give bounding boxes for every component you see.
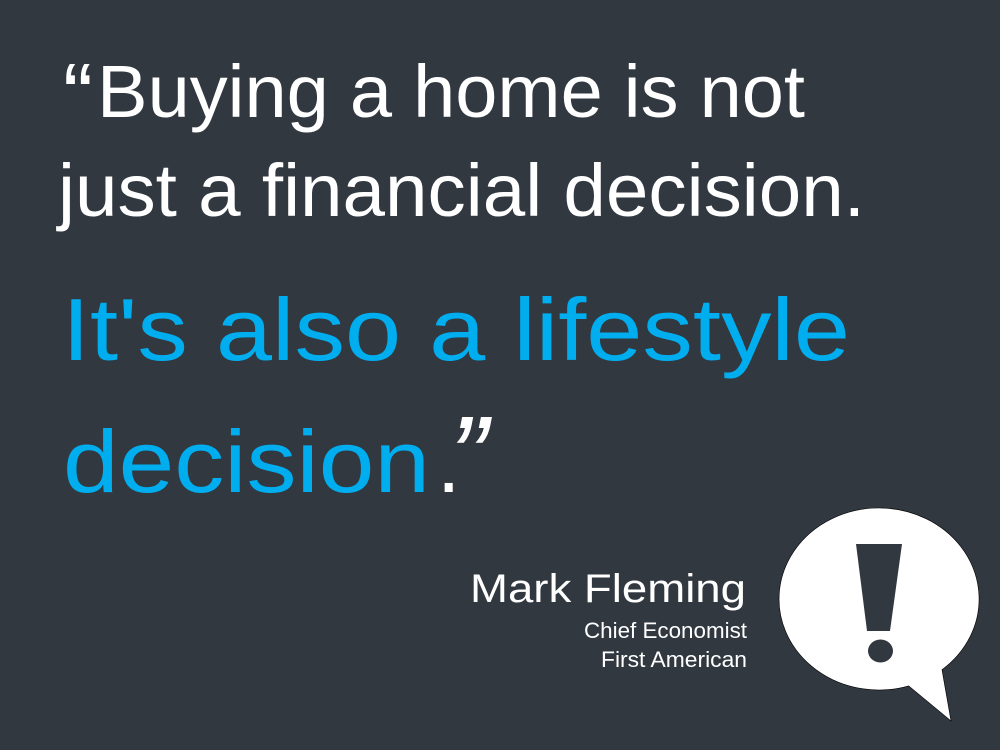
- quote: blue highlighted statement: decision: [63, 412, 430, 511]
- attribution: First American: [601, 647, 747, 672]
- attribution: Mark Fleming: [470, 567, 746, 611]
- quote: blue highlighted statement: .: [437, 416, 460, 510]
- icon: speech bubble with exclamation mark: [779, 508, 979, 721]
- quote: white statement: “: [63, 46, 93, 146]
- quote: white statement: just a financial decision.: [56, 149, 865, 232]
- attribution: Chief Economist: [584, 618, 747, 643]
- quote: blue highlighted statement: ”: [449, 392, 492, 522]
- quote: blue highlighted statement: [62, 280, 850, 522]
- attribution: [470, 567, 747, 672]
- quote: blue highlighted statement: It's also a lifestyle: [62, 280, 850, 379]
- quote: white statement: Buying a home is not: [97, 50, 805, 133]
- quote: white statement: [56, 46, 865, 232]
